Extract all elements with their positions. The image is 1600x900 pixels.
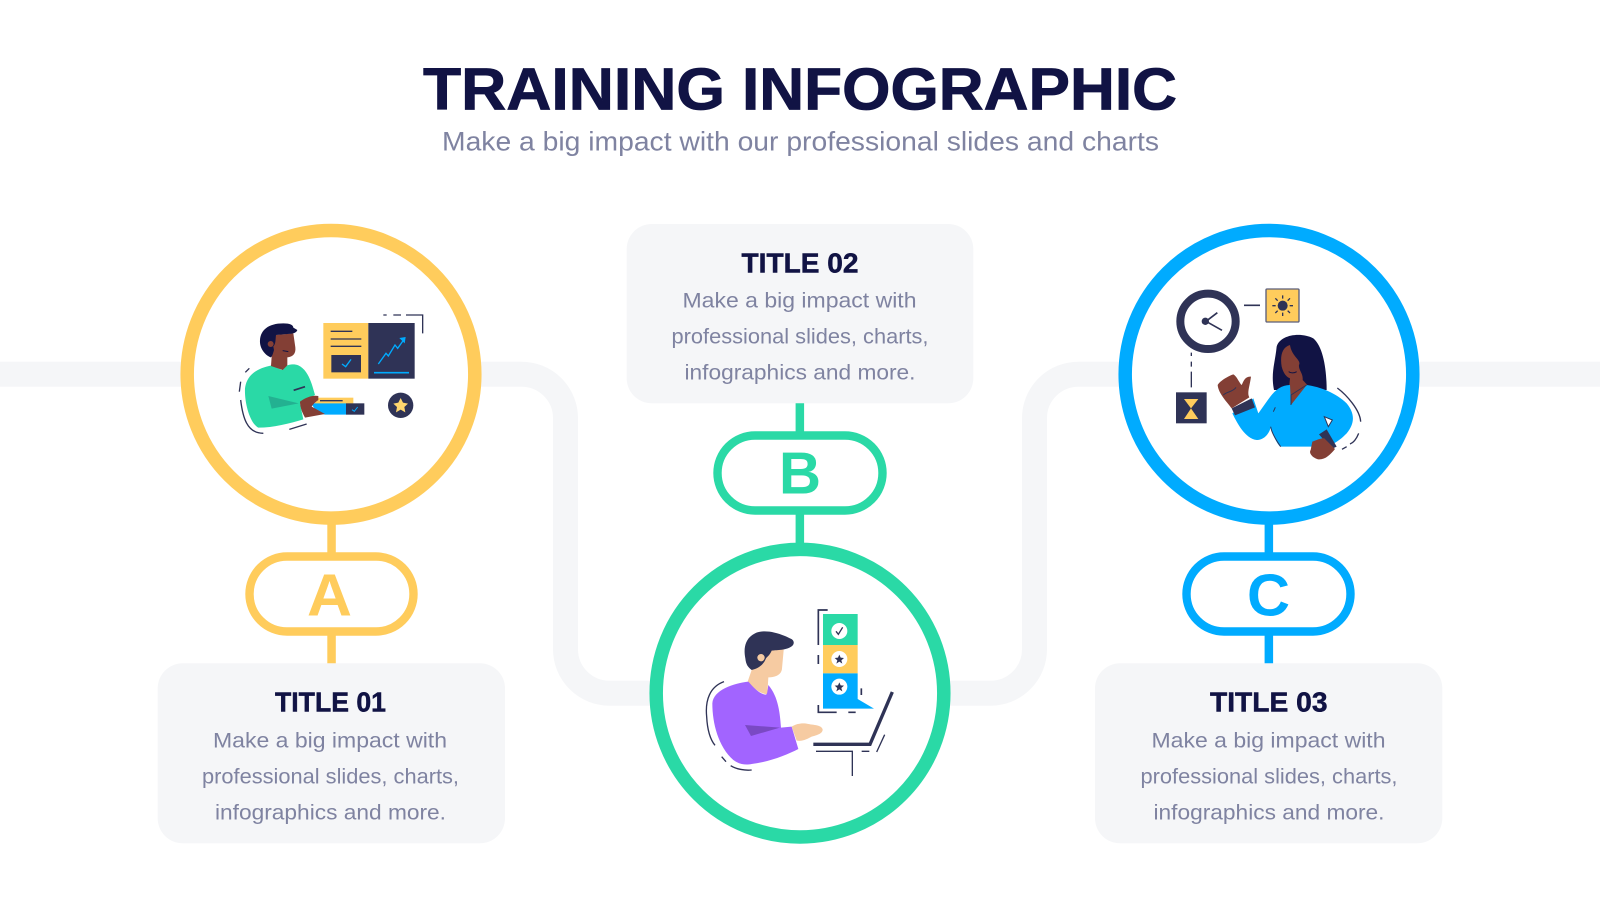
text card B xyxy=(627,224,973,403)
body text A: Make a big impact with xyxy=(213,729,447,752)
icon: presenter with board xyxy=(239,315,423,433)
body text A: infographics and more. xyxy=(215,801,446,824)
title xyxy=(423,56,1177,123)
heading: title 03: TITLE 03 xyxy=(1210,687,1328,718)
text card C xyxy=(1095,663,1442,843)
pill A: A xyxy=(307,562,352,628)
circle A xyxy=(187,230,475,518)
connector A xyxy=(327,515,336,664)
pill B xyxy=(718,436,882,510)
pill C xyxy=(1186,556,1350,632)
heading: title 02: TITLE 02 xyxy=(742,247,858,278)
connector C xyxy=(1265,515,1273,664)
subtitle: Make a big impact with our professional slides and charts xyxy=(442,126,1159,156)
body text C xyxy=(1140,729,1398,824)
icon: man at laptop with checklist xyxy=(706,610,892,776)
title: INFOGRAPHIC xyxy=(742,56,1177,123)
body text B: infographics and more. xyxy=(684,362,916,384)
body text A: professional slides, charts, xyxy=(202,765,459,788)
title: TRAINING xyxy=(423,56,725,123)
icon: woman with clock xyxy=(1176,289,1361,459)
heading: title 01: TITLE 01 xyxy=(275,687,386,718)
body text B: professional slides, charts, xyxy=(672,326,928,349)
body text A xyxy=(202,729,459,824)
body text C: Make a big impact with xyxy=(1152,729,1386,752)
body text B xyxy=(672,290,928,384)
body text C: infographics and more. xyxy=(1154,801,1384,824)
circle B xyxy=(656,549,944,837)
panel: step B xyxy=(627,224,973,837)
text card A xyxy=(158,663,505,843)
pill A xyxy=(250,556,414,632)
connector B xyxy=(796,403,804,548)
panel: step C xyxy=(1095,230,1442,843)
body text C: professional slides, charts, xyxy=(1140,765,1398,788)
panel: step A xyxy=(158,230,505,843)
circle C xyxy=(1125,230,1413,518)
pill B: B xyxy=(779,440,821,506)
body text B: Make a big impact with xyxy=(682,290,916,313)
pill C: C xyxy=(1247,562,1290,628)
